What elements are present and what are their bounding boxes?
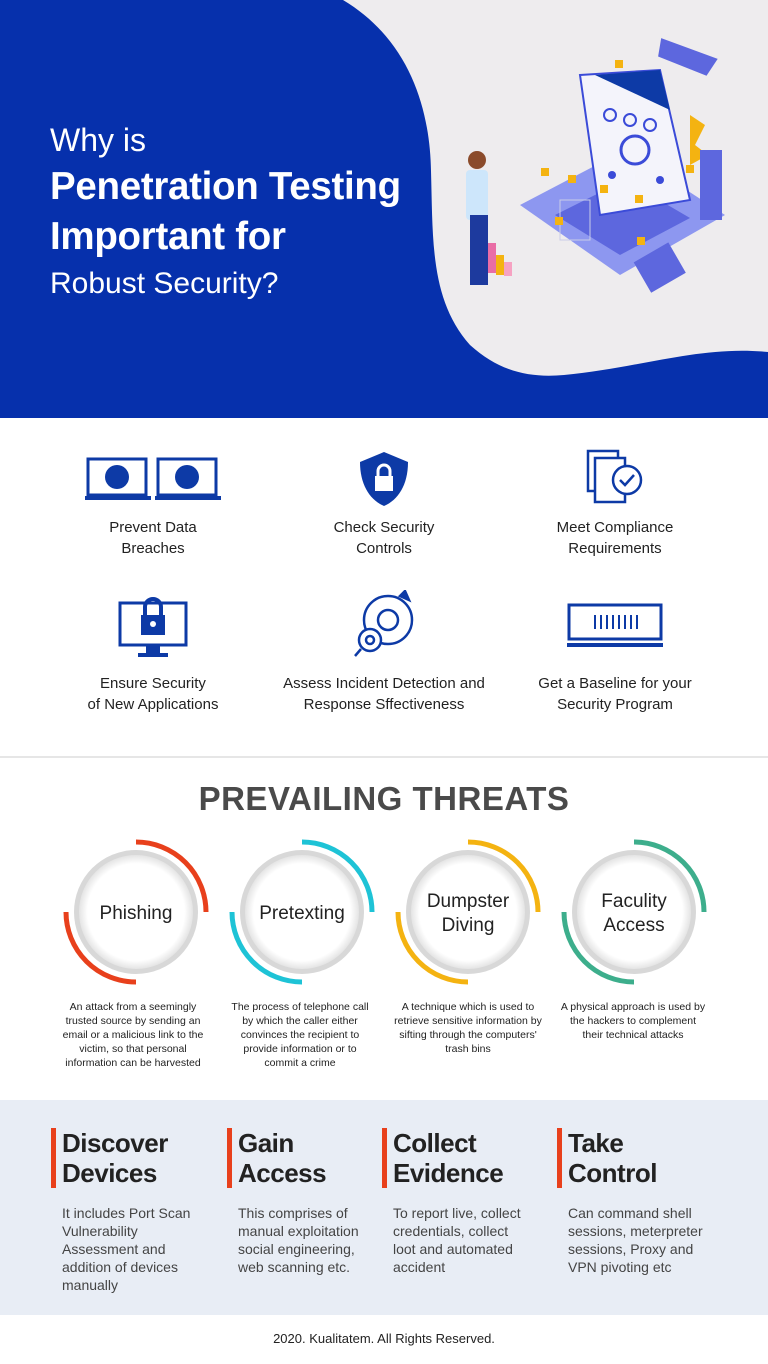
icon: detection target [354, 590, 414, 657]
icon: laptops [85, 458, 221, 500]
feature: assess incident detection: Assess Incident Detection and [283, 675, 485, 692]
feature: ensure security [88, 675, 218, 713]
step: discover devices: Discover [62, 1128, 168, 1158]
threat description: dumpster: A technique which is used to retrieve sensitive information by sifting through the computers' trash bins [394, 1001, 542, 1055]
feature: meet compliance: Requirements [568, 540, 662, 557]
threat ring: dumpster [398, 842, 538, 982]
illustration: laptop [466, 34, 725, 293]
step: take control: Control [568, 1158, 657, 1188]
step: discover devices: It includes Port Scan Vulnerability Assessment and addition of devices manually [62, 1205, 190, 1293]
threat circles: Pretexting [259, 903, 345, 924]
feature: check security controls: Check Security [334, 519, 434, 536]
threat ring: pretexting [232, 842, 372, 982]
feature: assess incident detection [283, 675, 485, 713]
step: take control: Take [568, 1128, 623, 1158]
title: Penetration Testing [50, 165, 401, 208]
title: Why is [50, 122, 146, 158]
feature: prevent data breaches [109, 519, 197, 557]
threat circles: Phishing [100, 903, 172, 924]
step: gain access: Gain [238, 1128, 294, 1158]
threat description: phishing: An attack from a seemingly trusted source by sending an email or a malicious link to the victim, so that personal information can be harvested [63, 1001, 203, 1069]
feature: check security controls: Controls [356, 540, 412, 557]
threat description: faculty: A physical approach is used by the hackers to complement their technical attacks [561, 1001, 705, 1041]
icon: server baseline [567, 604, 663, 647]
title [50, 122, 401, 300]
feature: assess incident detection: Response Sffectiveness [304, 696, 464, 713]
threat ring: faculty [564, 842, 704, 982]
threat description: pretexting: The process of telephone call by which the caller either convinces the recipient to provide information or to commit a crime [231, 1001, 369, 1069]
step: gain access: Access [238, 1158, 326, 1188]
step: take control [557, 1128, 703, 1275]
feature: prevent data breaches: Breaches [121, 540, 185, 557]
feature: prevent data breaches: Prevent Data [109, 519, 197, 536]
icon: monitor lock [118, 597, 188, 657]
threat circles: Diving [442, 915, 494, 936]
feature: meet compliance [557, 519, 673, 557]
step: collect evidence: To report live, collect credentials, collect loot and automated accident [393, 1205, 521, 1275]
feature: check security controls [334, 519, 434, 557]
threat ring: phishing [66, 842, 206, 982]
step: collect evidence: Evidence [393, 1158, 503, 1188]
feature: baseline [538, 675, 692, 713]
feature: ensure security: Ensure Security [100, 675, 206, 692]
step: collect evidence [382, 1128, 521, 1275]
footer: 2020. Kualitatem. All Rights Reserved. [273, 1331, 495, 1346]
step: take control: Can command shell sessions, meterpreter sessions, Proxy and VPN pivoting etc [568, 1205, 703, 1275]
threat circles: Access [603, 915, 665, 936]
icon: shield lock [360, 452, 408, 506]
heading: prevailing threats: PREVAILING THREATS [199, 780, 569, 817]
step: gain access [227, 1128, 359, 1275]
feature: meet compliance: Meet Compliance [557, 519, 673, 536]
threat circles: Dumpster [427, 891, 510, 912]
title: Important for [50, 215, 286, 258]
step: gain access: This comprises of manual exploitation social engineering, web scanning etc. [238, 1205, 359, 1275]
panel: steps [0, 1100, 768, 1315]
icon: compliance documents [586, 450, 642, 504]
step: collect evidence: Collect [393, 1128, 476, 1158]
feature: ensure security: of New Applications [88, 696, 218, 713]
title: Robust Security? [50, 267, 278, 300]
threat circles [64, 840, 706, 984]
header banner [0, 0, 768, 418]
feature: baseline: Security Program [557, 696, 673, 713]
feature: baseline: Get a Baseline for your [538, 675, 692, 692]
step: discover devices [51, 1128, 190, 1293]
step: discover devices: Devices [62, 1158, 157, 1188]
threat circles: Faculity [601, 891, 667, 912]
